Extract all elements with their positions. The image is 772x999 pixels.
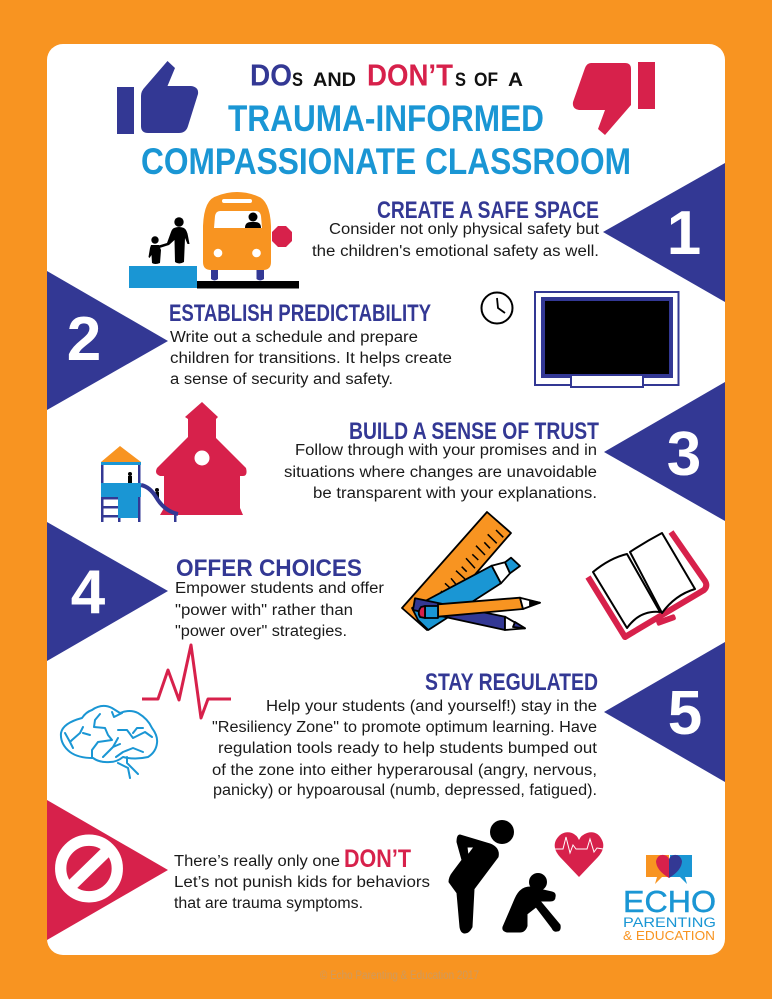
icon: blackboard [535, 292, 678, 387]
body 5: panicky) or hypoarousal (numb, depressed, fatigued). [213, 782, 597, 799]
don't text: There’s really only one [174, 853, 340, 870]
icon: schoolhouse [156, 402, 247, 515]
body 4: Empower students and offer [175, 580, 384, 597]
logo: Echo Parenting & Education [623, 855, 716, 943]
number marker 1 [603, 163, 725, 302]
icon: playground [101, 446, 178, 522]
title: S [455, 70, 466, 91]
step 5 [212, 642, 725, 799]
body 5 [212, 698, 598, 799]
body 5: "Resiliency Zone" to promote optimum learning. Have [212, 719, 597, 736]
number marker 5 [604, 642, 725, 782]
title: COMPASSIONATE CLASSROOM [141, 141, 631, 182]
step 3 [284, 382, 725, 521]
number marker 4: 4 [71, 558, 106, 627]
number marker 4 [47, 522, 168, 661]
title: TRAUMA-INFORMED [228, 98, 544, 139]
title: OF [474, 70, 498, 91]
title: S [292, 70, 303, 91]
number marker 1: 1 [667, 199, 701, 268]
number marker 2 [47, 271, 168, 410]
logo: Echo Parenting & Education: PARENTING [623, 915, 716, 930]
icon: heart with pulse [555, 832, 603, 877]
body 5: of the zone into either hyperarousal (angry, nervous, [212, 762, 597, 779]
body 3: situations where changes are unavoidable [284, 464, 597, 481]
don't section [47, 800, 430, 940]
title: A [508, 70, 523, 91]
icon: bus stop scene [129, 192, 299, 288]
don't text: that are trauma symptoms. [174, 895, 363, 912]
number marker 5: 5 [668, 679, 702, 748]
footer copyright: © Echo Parenting & Education 2017 [320, 970, 479, 982]
icon: ruler, marker and pencils [402, 512, 540, 630]
icon: open book [588, 532, 706, 637]
step 1 [312, 163, 725, 302]
heading 5: STAY REGULATED [425, 669, 598, 696]
body 2 [170, 329, 452, 388]
body 2: children for transitions. It helps create [170, 350, 452, 367]
body 1: the children's emotional safety as well. [312, 243, 599, 260]
title [141, 58, 631, 182]
don't text: DON’T [344, 845, 411, 873]
title: DON’T [367, 58, 453, 92]
number marker 3 [604, 382, 725, 521]
logo: Echo Parenting & Education: ECHO [623, 884, 716, 919]
icon: sitting person [503, 873, 560, 932]
logo: Echo Parenting & Education: & EDUCATION [623, 928, 715, 943]
number marker 3: 3 [667, 420, 701, 489]
icon: thumbs down [573, 62, 655, 135]
don't text: Let’s not punish kids for behaviors [174, 874, 430, 891]
icon: brain [61, 706, 157, 778]
body 3 [284, 442, 597, 502]
body 3: Follow through with your promises and in [295, 442, 597, 459]
step 2 [47, 271, 452, 410]
heading 2: ESTABLISH PREDICTABILITY [169, 300, 431, 327]
body 3: be transparent with your explanations. [313, 485, 597, 502]
heading 1: CREATE A SAFE SPACE [377, 197, 599, 224]
no symbol marker [47, 800, 168, 940]
title: AND [313, 70, 356, 91]
number marker 2: 2 [67, 305, 101, 374]
don't text [174, 845, 430, 912]
body 5: regulation tools ready to help students bumped out [218, 740, 598, 757]
body 1 [312, 221, 600, 260]
icon: thumbs up [117, 61, 198, 134]
icon: bending person [449, 820, 514, 933]
body 2: Write out a schedule and prepare [170, 329, 418, 346]
step 4 [47, 522, 384, 661]
body 2: a sense of security and safety. [170, 371, 393, 388]
body 4: "power over" strategies. [175, 623, 347, 640]
body 1: Consider not only physical safety but [329, 221, 600, 238]
body 4 [175, 580, 384, 640]
icon: heartbeat line [142, 645, 231, 718]
title: DO [250, 58, 292, 92]
heading 4: OFFER CHOICES [176, 555, 362, 582]
body 4: "power with" rather than [175, 602, 353, 619]
heading 3: BUILD A SENSE OF TRUST [349, 418, 599, 445]
body 5: Help your students (and yourself!) stay in the [266, 698, 597, 715]
icon: clock [482, 292, 512, 324]
